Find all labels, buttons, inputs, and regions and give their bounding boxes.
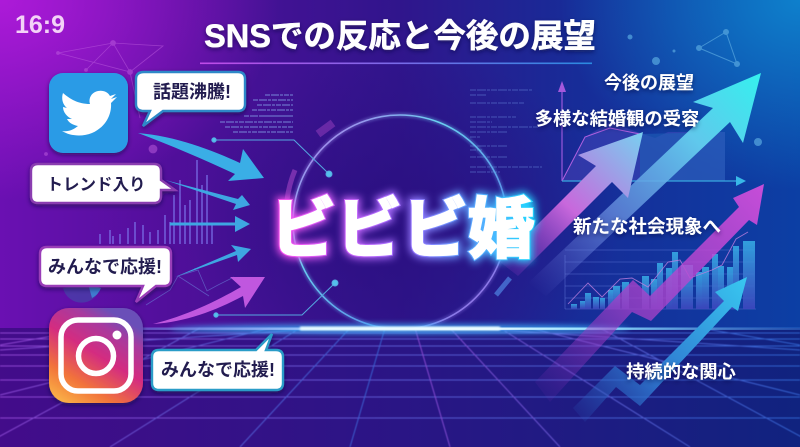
callout: みんなで応援 upper	[40, 247, 171, 302]
arrow: blue zigzag arrow	[573, 277, 747, 422]
arrow: from Twitter	[138, 133, 264, 181]
arrow: large cyan rising arrow	[528, 73, 761, 296]
perspective grid floor	[0, 328, 800, 447]
callout: みんなで応援 lower: みんなで応援!	[161, 360, 275, 380]
callout: みんなで応援 upper: みんなで応援!	[48, 257, 162, 277]
central glow ring	[287, 115, 510, 329]
pie chart decoration	[63, 284, 101, 303]
camera dot	[112, 330, 122, 340]
arrow: pink zigzag arrow	[535, 184, 764, 402]
arrow: second feed	[165, 180, 250, 210]
text: 持続的な関心: 持続的な関心	[626, 361, 736, 382]
text: 多様な結婚観の受容: 多様な結婚観の受容	[535, 108, 699, 129]
left bar chart decoration	[100, 160, 212, 244]
callout: みんなで応援 lower	[152, 334, 283, 390]
callout: 話題沸騰	[136, 72, 245, 126]
horizon light line	[120, 324, 800, 334]
icon: bird	[62, 91, 117, 135]
callout: トレンド入り	[31, 164, 175, 203]
callout: トレンド入り: トレンド入り	[46, 175, 146, 194]
icon: Instagram	[49, 308, 143, 403]
main title: ビビビ婚: ビビビ婚	[270, 192, 534, 266]
title underline	[200, 62, 592, 64]
main title: ビビビ婚: ビビビ婚	[270, 192, 534, 266]
circuit lines	[212, 138, 338, 317]
arrow: third feed	[170, 216, 250, 232]
code text decoration: left block	[220, 95, 293, 132]
chart: top right area chart	[558, 81, 746, 186]
arrow: fourth feed	[175, 245, 251, 277]
network decoration: top right	[628, 30, 762, 146]
text: 新たな社会現象へ: 新たな社会現象へ	[573, 216, 721, 237]
chart: right bar chart	[565, 232, 756, 309]
icon: Twitter	[49, 73, 128, 153]
main title: ビビビ婚: ビビビ婚	[270, 192, 534, 266]
arrow: purple from Instagram	[153, 277, 265, 324]
camera outline	[61, 320, 131, 391]
aspect ratio label: 16:9	[15, 11, 65, 39]
callout: 話題沸騰: 話題沸騰!	[153, 82, 231, 102]
line map decoration	[146, 268, 234, 305]
text: 今後の展望: 今後の展望	[604, 72, 694, 93]
arrow: violet rising arrow	[500, 132, 643, 276]
title: SNSでの反応と今後の展望	[204, 18, 596, 54]
network decoration: top left	[44, 40, 163, 156]
camera lens	[78, 338, 114, 374]
code text decoration: right block	[470, 90, 542, 172]
